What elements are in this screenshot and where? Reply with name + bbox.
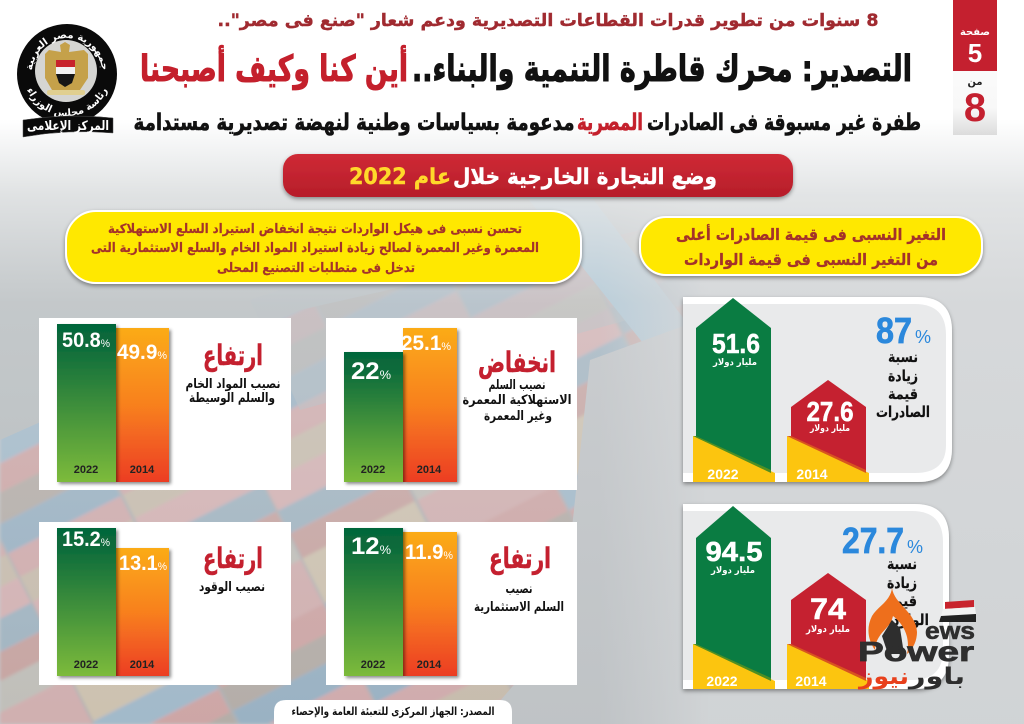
arrow: 2014 exports: 2014 [796, 466, 828, 482]
stat: 27.7 percent: قيمة [887, 592, 917, 610]
yellow callout: relative change: من التغير النسبى فى قيمة الواردات [684, 250, 938, 269]
logo: media center emblem: جمهورية مصر العربية [27, 34, 106, 70]
panel: consumer goods share: انخفاض [478, 346, 556, 379]
panel: capital goods share [326, 522, 577, 685]
red banner heading: عام 2022 [349, 165, 451, 190]
subtitle: مدعومة بسياسات وطنية لنهضة تصديرية مستدامة [134, 110, 574, 136]
bar chart: fuel [57, 528, 169, 676]
subtitle: المصرية [577, 110, 643, 136]
arrow: 2022 exports [693, 298, 775, 482]
panel: consumer goods share [326, 318, 577, 490]
watermark: News Power logo [858, 588, 976, 690]
logo: media center emblem [17, 24, 117, 138]
yellow callout: imports structure: المعمرة وغير المعمرة لصالح زيادة استيراد المواد الخام والسلع الاستثمارية التى [91, 241, 539, 256]
watermark: News Power logo: باور [908, 664, 965, 690]
panel: fuel share [39, 522, 291, 685]
stat: 87 percent: قيمة [888, 385, 918, 403]
bar chart: capital goods: 12% [351, 533, 391, 560]
arrow: 2014 imports: 74 [810, 593, 846, 626]
bar chart: raw materials: 2022 [74, 464, 98, 476]
panel: consumer goods share: وغير المعمرة [484, 409, 552, 424]
watermark: News Power logo: ews [925, 618, 975, 645]
arrow: 2022 exports: 51.6 [712, 328, 760, 359]
arrow: 2022 imports [693, 506, 775, 689]
bar chart: consumer goods: 22% [351, 358, 391, 385]
panel: capital goods share: ارتفاع [489, 542, 551, 575]
arrow: 2014 imports: مليار دولار [805, 624, 850, 635]
bar chart: raw materials: 2014 [130, 464, 155, 476]
yellow callout: imports structure [66, 211, 581, 283]
bar chart: consumer goods: 2014 [417, 464, 442, 476]
panel: fuel share: ارتفاع [203, 542, 263, 575]
source note: المصدر: الجهاز المركزى للتعبئة العامة والإحصاء [292, 705, 494, 718]
bar chart: fuel: 2014 [130, 659, 155, 671]
top line heading: 8 سنوات من تطوير قدرات القطاعات التصديرية ودعم شعار "صنع فى مصر".. [217, 11, 879, 31]
bar chart: fuel: 13.1% [119, 552, 167, 575]
panel: raw materials share: والسلم الوسيطة [189, 391, 275, 406]
bar chart: raw materials: 50.8% [62, 329, 110, 352]
bar chart: consumer goods: 2022 [361, 464, 385, 476]
arrow: 2022 imports: مليار دولار [710, 566, 755, 576]
yellow callout: imports structure: تدخل فى متطلبات التصنيع المحلى [217, 261, 415, 276]
icon: eagle [45, 42, 88, 95]
bar chart: capital goods: 2022 [361, 659, 385, 671]
page marker: صفحة [960, 27, 990, 38]
yellow callout: relative change: التغير النسبى فى قيمة الصادرات أعلى [676, 224, 946, 244]
stat: 87 percent: 87 [876, 310, 912, 351]
panel: raw materials share [39, 318, 291, 490]
main title: أين كنا وكيف أصبحنا [140, 45, 408, 90]
bar chart: fuel: 2022 [74, 659, 98, 671]
logo: media center emblem: المركز الإعلامى [27, 119, 109, 134]
bar chart: capital goods [344, 528, 457, 676]
stat: 27.7 percent: 27.7 [842, 520, 904, 561]
arrow: 2014 exports: 27.6 [806, 396, 854, 427]
icon: Egyptian flag [939, 600, 976, 622]
arrow: 2014 imports: 2014 [795, 673, 827, 689]
stat: 27.7 percent: % [907, 537, 923, 557]
bar chart: fuel: 15.2% [62, 528, 110, 551]
stat: 87 percent: زيادة [888, 367, 918, 385]
bar chart: capital goods: 11.9% [405, 541, 453, 564]
bar chart: raw materials: 49.9% [117, 341, 167, 364]
arrow: 2022 imports: 2022 [706, 673, 738, 689]
stat: 27.7 percent: نسبة [887, 555, 917, 573]
watermark: News Power logo: نيوز [858, 664, 909, 690]
arrow: 2014 imports [787, 573, 869, 689]
stat: 87 percent: نسبة [888, 348, 918, 366]
main title [140, 45, 912, 90]
arrow: 2022 imports: 94.5 [706, 536, 762, 567]
panel: exports value [683, 297, 952, 482]
stat: 87 percent: الصادرات [876, 403, 930, 421]
red banner heading [283, 154, 793, 197]
panel: capital goods share: السلم الاستثمارية [474, 600, 564, 615]
panel: fuel share: نصيب الوقود [199, 580, 265, 595]
yellow callout: relative change [640, 217, 982, 275]
panel: raw materials share: نصيب المواد الخام [186, 377, 280, 392]
panel: capital goods share: نصيب [506, 582, 532, 597]
logo: media center emblem: رئاسة مجلس الوزراء [27, 88, 108, 116]
yellow callout: imports structure: تحسن نسبى فى هيكل الواردات نتيجة انخفاض استيراد السلع الاستهلاكية [108, 222, 522, 237]
page marker: 5 [968, 38, 982, 68]
arrow: 2014 exports [787, 380, 869, 482]
icon: flame [868, 588, 917, 654]
stat: 27.7 percent: زيادة [887, 574, 917, 592]
red banner heading: وضع التجارة الخارجية خلال [453, 165, 717, 190]
stat: 27.7 percent: الواردات [875, 611, 929, 629]
stat: 27.7 percent [842, 520, 929, 629]
stat: 87 percent: % [915, 327, 931, 347]
bar chart: raw materials [57, 324, 169, 482]
arrow: 2022 exports: 2022 [707, 466, 739, 482]
page marker: 8 [964, 86, 986, 130]
panel: consumer goods share: الاستهلاكية المعمرة [462, 393, 572, 408]
panel: consumer goods share: نصيب السلم [488, 378, 546, 393]
arrow: 2022 exports: مليار دولار [712, 358, 757, 368]
panel: raw materials share: ارتفاع [203, 339, 263, 372]
stat: 87 percent [876, 310, 931, 421]
page marker [953, 0, 997, 135]
subtitle: طفرة غير مسبوقة فى الصادرات [647, 110, 921, 136]
bar chart: capital goods: 2014 [417, 659, 442, 671]
bar chart: consumer goods: 25.1% [401, 332, 451, 355]
source note [274, 700, 512, 724]
panel: imports value [683, 504, 949, 689]
bar chart: consumer goods [344, 328, 457, 482]
arrow: 2014 exports: مليار دولار [809, 424, 850, 434]
page marker: من [968, 77, 982, 88]
watermark: News Power logo: Power [858, 636, 974, 667]
